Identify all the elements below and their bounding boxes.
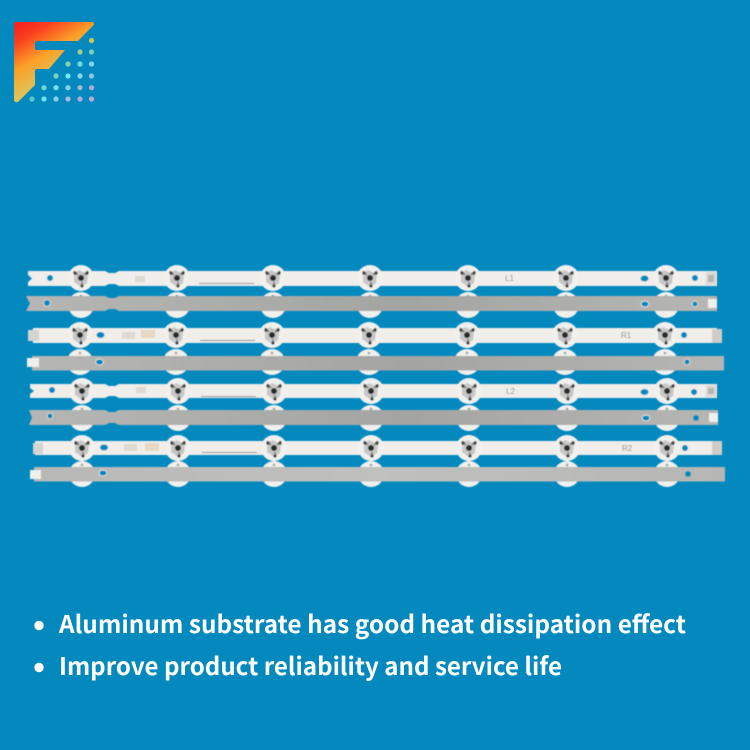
- text line 2: Improve product reliability and service life: [59, 648, 562, 683]
- strip R2 front: [33, 435, 722, 461]
- strip R2 front: R2: [622, 444, 633, 453]
- strip L1 front: L1: [505, 274, 514, 283]
- text line 1: Aluminum substrate has good heat dissipation effect: [58, 606, 686, 641]
- bullet 2: [34, 663, 44, 672]
- LED strips: [26, 265, 725, 487]
- strip 4 back: [27, 349, 724, 375]
- logo dots: [29, 38, 94, 102]
- bullet 1: [34, 621, 44, 630]
- strip 8 back: [30, 461, 725, 487]
- bullet list: [34, 606, 686, 683]
- strip L1 front: [28, 265, 717, 291]
- logo letter F: [14, 22, 94, 102]
- strip 6 back: [29, 405, 718, 431]
- strip R1 front: [28, 322, 722, 348]
- strip L2 front: [30, 378, 717, 404]
- logo: [14, 22, 94, 102]
- strip L2 front: L2: [506, 387, 515, 396]
- strip 2 back: [26, 292, 717, 318]
- strip R1 front: R1: [621, 331, 632, 340]
